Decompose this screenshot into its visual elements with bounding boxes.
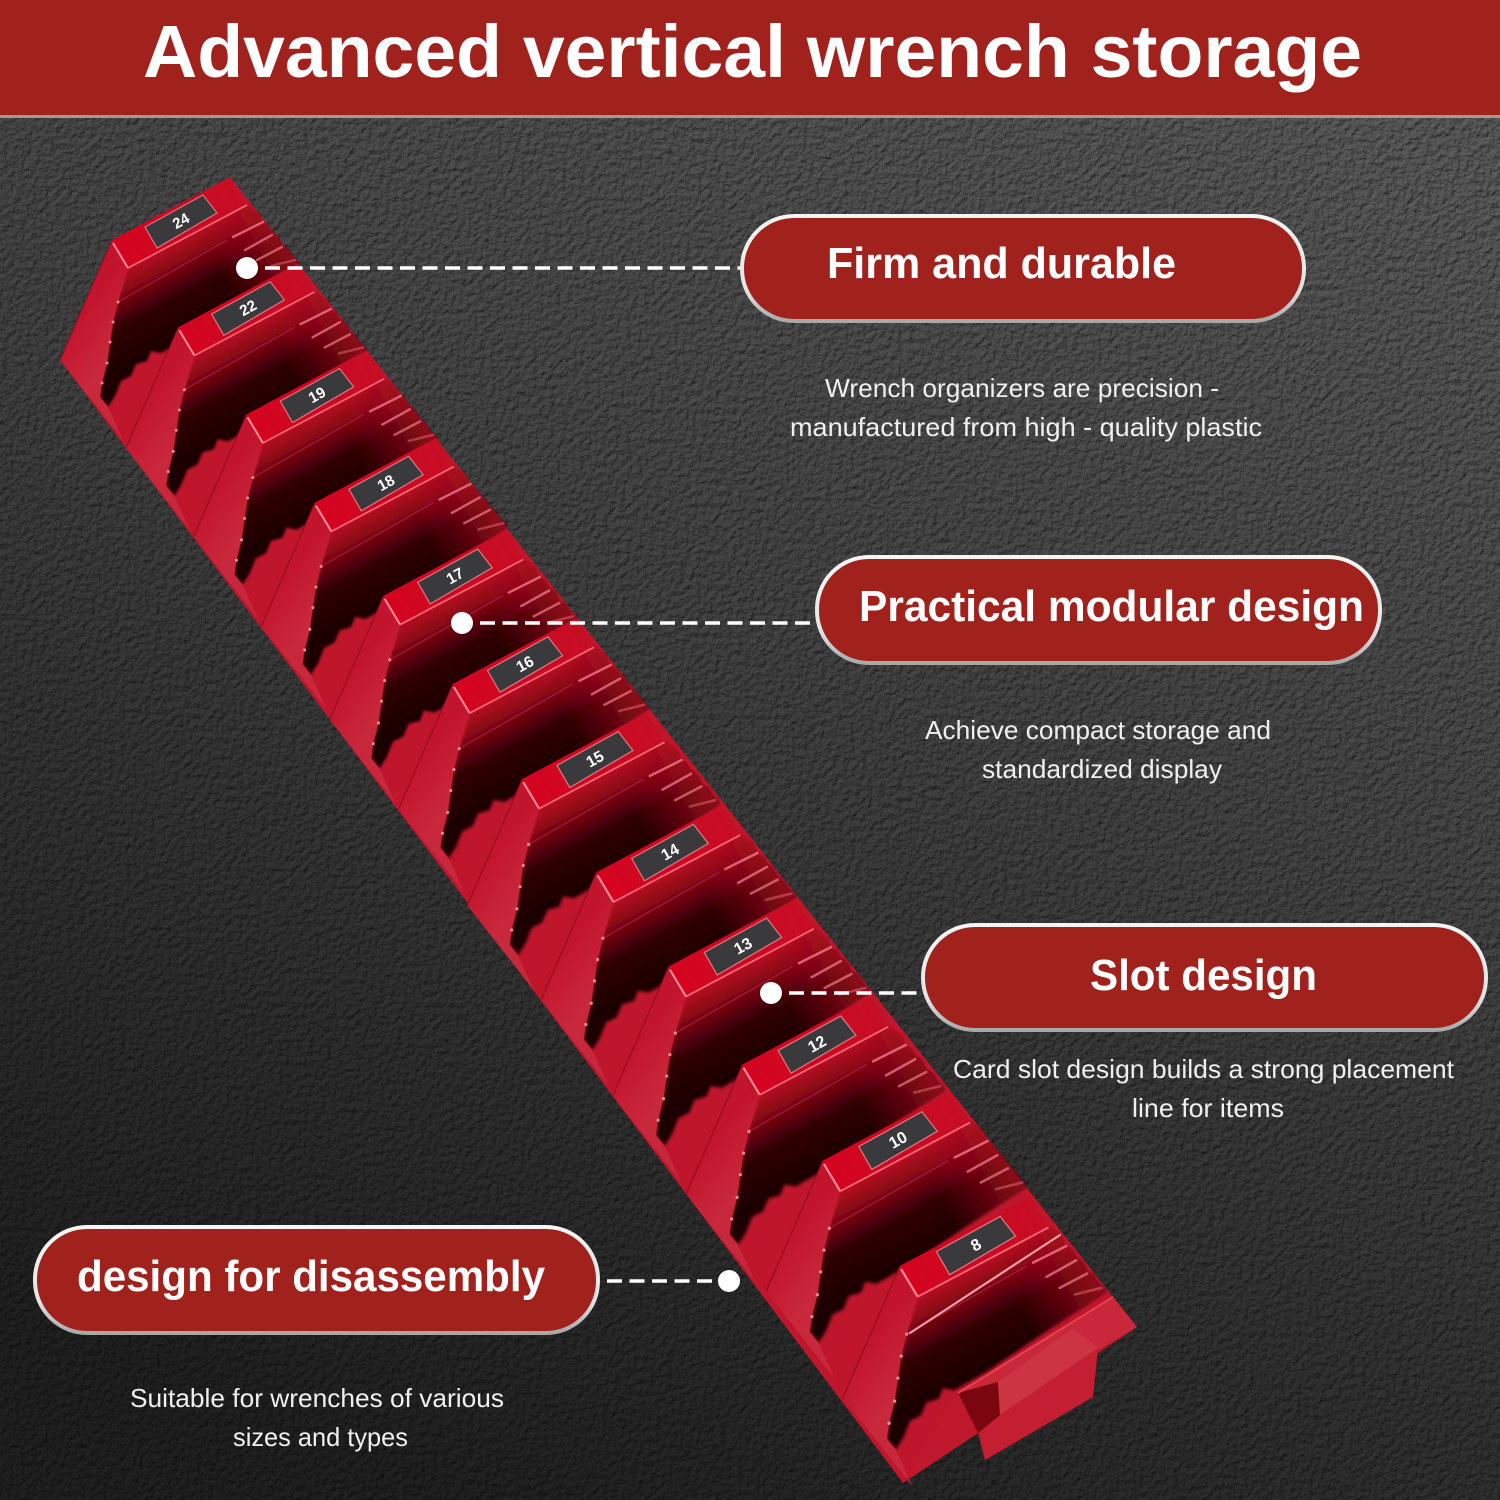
callout: design for disassembly — [35, 1227, 740, 1452]
leader dot — [760, 982, 782, 1004]
pill — [923, 925, 1486, 1030]
description — [790, 373, 1262, 442]
description: sizes and types — [233, 1422, 408, 1452]
description — [130, 1383, 504, 1452]
description — [953, 1054, 1455, 1123]
module size 15: 15 — [584, 748, 607, 771]
module size 18 — [261, 438, 508, 709]
module size 10: 10 — [886, 1128, 911, 1153]
callout: firm and durable — [236, 216, 1304, 442]
module size 22 — [126, 264, 367, 529]
module size 22: 22 — [237, 297, 260, 320]
leader dot — [718, 1270, 740, 1292]
pill heading: Firm and durable — [827, 239, 1176, 288]
module size 13 — [613, 899, 870, 1181]
pill — [35, 1227, 598, 1333]
description: Suitable for wrenches of various — [130, 1383, 504, 1413]
module size 8 — [843, 1197, 1106, 1486]
organizer body — [60, 177, 1137, 1483]
description: Wrench organizers are precision - — [825, 373, 1219, 403]
wrench organizer product — [60, 177, 1137, 1486]
module size 10 — [766, 1092, 1027, 1379]
pill heading: Slot design — [1090, 951, 1317, 1000]
description — [925, 715, 1271, 784]
leader dashes — [265, 266, 740, 270]
pill — [742, 216, 1304, 321]
leader dot — [451, 612, 473, 634]
pill heading: Practical modular design — [859, 582, 1364, 631]
highlight ridge on last module — [910, 1235, 1060, 1333]
module size 17 — [330, 530, 577, 803]
module size 24 — [60, 177, 299, 440]
callout: practical modular design — [451, 557, 1380, 784]
description: standardized display — [982, 754, 1222, 784]
module size 14 — [541, 805, 796, 1085]
module size 24: 24 — [170, 210, 193, 233]
module size 19: 19 — [306, 384, 329, 407]
leader dashes — [480, 621, 815, 625]
pill heading: design for disassembly — [77, 1252, 545, 1301]
description: Achieve compact storage and — [925, 715, 1271, 745]
title band — [0, 0, 1500, 118]
description: manufactured from high - quality plastic — [790, 412, 1262, 442]
module size 12: 12 — [805, 1032, 829, 1057]
module size 15 — [467, 713, 719, 990]
module size 16: 16 — [514, 653, 537, 676]
leader dashes — [600, 1279, 712, 1283]
module size 13: 13 — [731, 934, 755, 959]
module size 12 — [686, 996, 944, 1281]
module size 16 — [399, 618, 648, 893]
description: line for items — [1132, 1093, 1284, 1123]
description: Card slot design builds a strong placement — [953, 1054, 1455, 1084]
pill — [817, 557, 1380, 663]
callout: slot design — [760, 925, 1486, 1123]
module size 17: 17 — [444, 565, 467, 588]
module size 14: 14 — [659, 841, 682, 864]
module size 19 — [194, 350, 437, 618]
module size 8: 8 — [968, 1235, 985, 1256]
leader dot — [236, 257, 258, 279]
leader dashes — [789, 991, 921, 995]
module size 18: 18 — [375, 472, 398, 495]
end connector — [903, 1297, 1137, 1483]
title: Advanced vertical wrench storage — [143, 10, 1362, 93]
